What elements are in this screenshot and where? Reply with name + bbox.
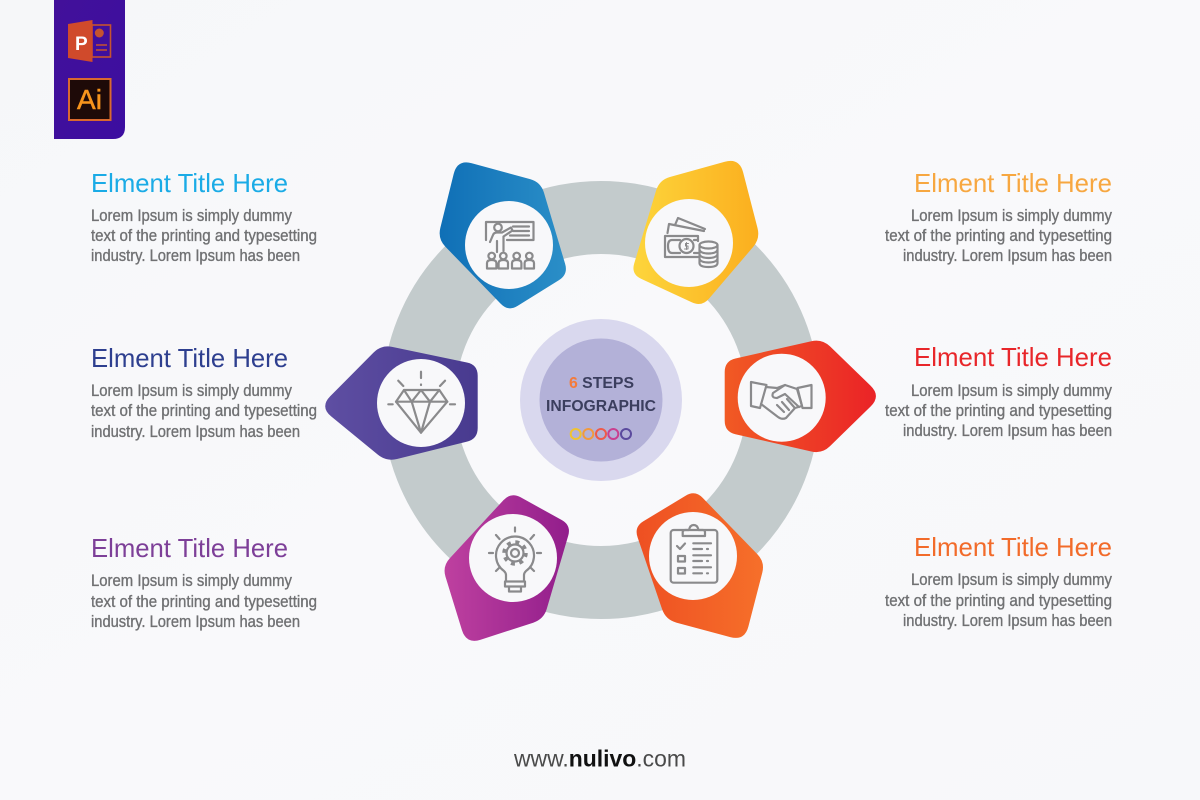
- body: top right: Lorem Ipsum is simply dummy: [911, 207, 1113, 225]
- center colored rings: [571, 429, 631, 439]
- text block: top right: [885, 168, 1113, 265]
- body: middle left: text of the printing and typesetting: [91, 402, 317, 420]
- body: middle left: [91, 382, 317, 441]
- icon: presentation: [486, 222, 534, 268]
- text block: middle left: [91, 343, 317, 441]
- icon: clipboard: [671, 525, 717, 583]
- title: bottom left: Elment Title Here: [91, 533, 288, 563]
- body: bottom left: [91, 572, 317, 631]
- body: bottom left: Lorem Ipsum is simply dummy: [91, 572, 293, 590]
- body: middle right: [885, 382, 1113, 440]
- title: middle right: Elment Title Here: [914, 342, 1112, 372]
- body: top left: [91, 207, 317, 265]
- step: yellow money: [633, 161, 758, 304]
- text block: top left: [91, 168, 317, 265]
- body: middle right: industry. Lorem Ipsum has been: [903, 422, 1112, 440]
- title: bottom right: Elment Title Here: [914, 532, 1112, 562]
- body: top right: text of the printing and typesetting: [885, 227, 1112, 245]
- icon: money: [665, 218, 718, 267]
- body: bottom left: industry. Lorem Ipsum has been: [91, 613, 300, 631]
- title: top right: Elment Title Here: [914, 168, 1112, 198]
- body: top right: industry. Lorem Ipsum has been: [903, 247, 1112, 265]
- icon: handshake: [751, 382, 812, 419]
- body: middle left: industry. Lorem Ipsum has been: [91, 423, 300, 441]
- body: bottom right: Lorem Ipsum is simply dummy: [911, 571, 1113, 589]
- badge: software icons: [54, 0, 125, 139]
- title: top left: Elment Title Here: [91, 168, 288, 198]
- ring: [418, 218, 784, 582]
- body: bottom left: text of the printing and typesetting: [91, 593, 317, 611]
- body: top left: text of the printing and typesetting: [91, 227, 317, 245]
- text block: bottom left: [91, 533, 317, 631]
- body: middle left: Lorem Ipsum is simply dummy: [91, 382, 293, 400]
- center badge: [520, 319, 682, 481]
- step: blue presentation: [440, 162, 566, 308]
- body: middle right: text of the printing and typesetting: [885, 402, 1112, 420]
- step: magenta idea: [445, 495, 569, 641]
- center title line 1: 6 STEPS: [569, 375, 634, 392]
- text block: middle right: [885, 342, 1113, 440]
- body: top right: [885, 207, 1113, 265]
- footer url: www.nulivo.com: [513, 746, 686, 772]
- icon: lightbulb gear: [489, 528, 541, 592]
- body: top left: industry. Lorem Ipsum has been: [91, 247, 300, 265]
- icon: PowerPoint: P: [75, 34, 88, 55]
- body: bottom right: text of the printing and typesetting: [885, 592, 1112, 610]
- icon: Illustrator: Ai: [77, 84, 102, 115]
- title: middle left: Elment Title Here: [91, 343, 288, 373]
- body: top left: Lorem Ipsum is simply dummy: [91, 207, 293, 225]
- body: bottom right: industry. Lorem Ipsum has been: [903, 612, 1112, 630]
- body: bottom right: [885, 571, 1113, 630]
- step: purple diamond: [325, 346, 478, 460]
- step: red handshake: [725, 341, 876, 452]
- icon: diamond: [388, 372, 455, 433]
- center title line 2: INFOGRAPHIC: [546, 398, 656, 415]
- body: middle right: Lorem Ipsum is simply dummy: [911, 382, 1113, 400]
- text block: bottom right: [885, 532, 1113, 630]
- step: orange checklist: [637, 493, 763, 638]
